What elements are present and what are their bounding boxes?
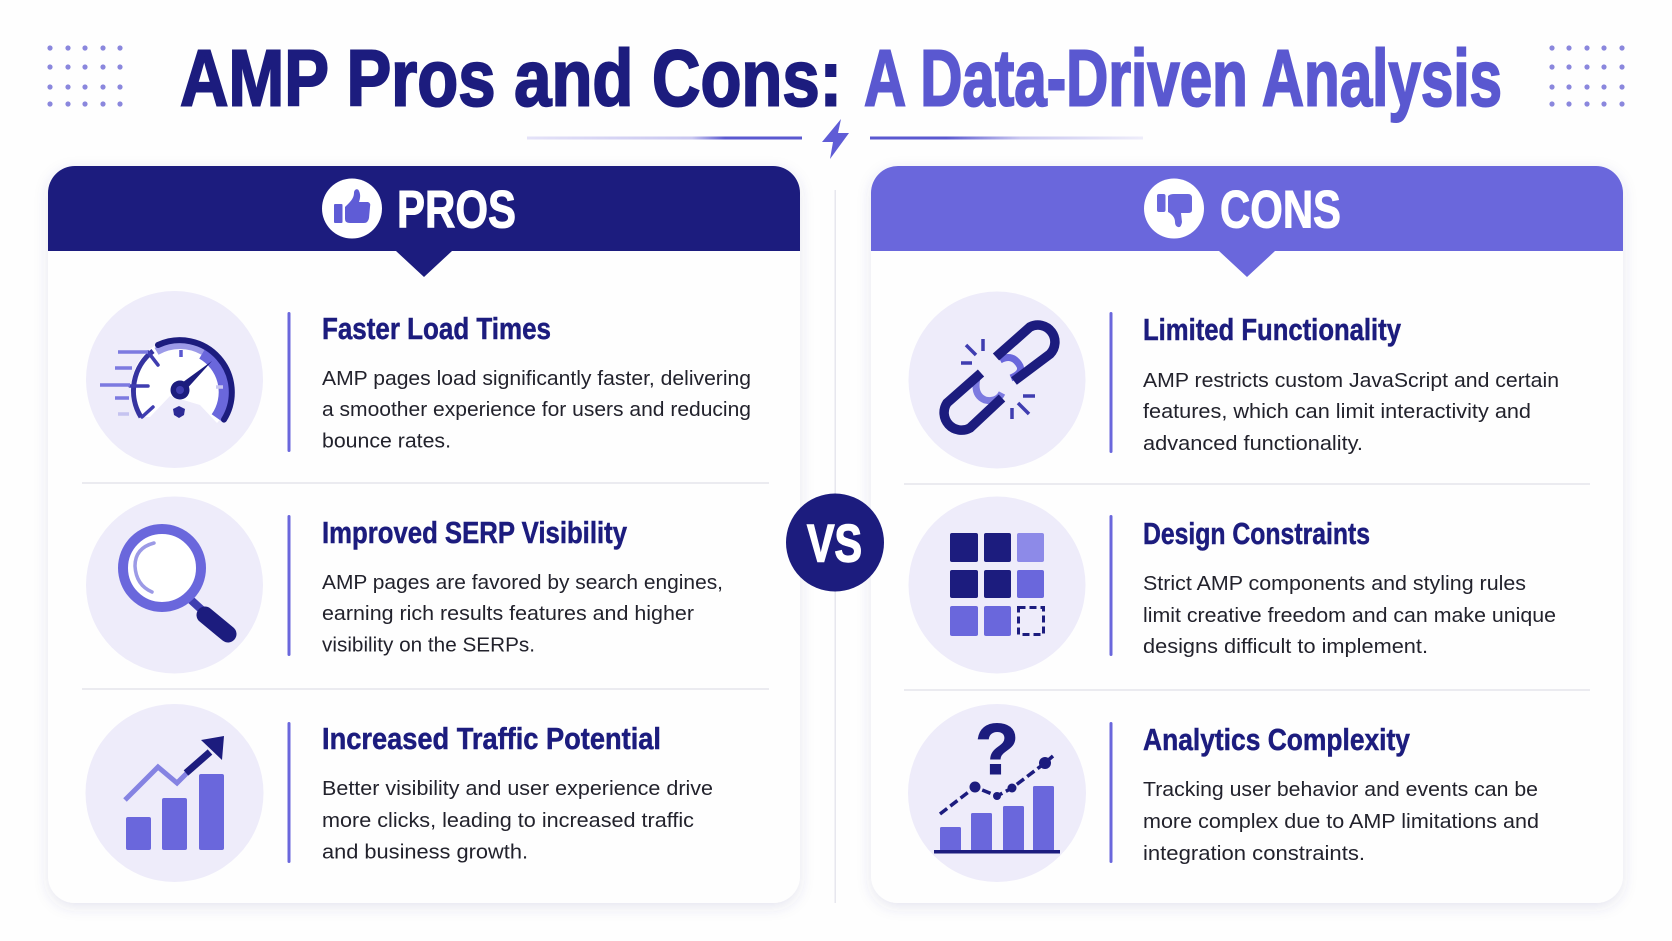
title divider with lightning bolt bbox=[527, 119, 1143, 159]
row: analytics complexity bbox=[908, 704, 1539, 882]
text: design constraints description: limit creative freedom and can make unique bbox=[1143, 604, 1556, 627]
text: design constraints description bbox=[1143, 572, 1556, 658]
text: improved serp visibility description: visibility on the SERPs. bbox=[322, 634, 535, 656]
row: limited functionality bbox=[908, 292, 1559, 468]
icon: speedometer bbox=[86, 291, 263, 468]
text: analytics complexity description bbox=[1143, 778, 1539, 865]
text: faster load times description bbox=[322, 367, 751, 452]
text: analytics complexity description: Tracking user behavior and events can be bbox=[1143, 778, 1538, 801]
icon: broken chain link bbox=[908, 292, 1086, 468]
decorative dots: left bbox=[47, 45, 123, 107]
text: analytics complexity description: integration constraints. bbox=[1143, 842, 1365, 865]
cons heading: CONS bbox=[1220, 180, 1341, 240]
text: design constraints description: Strict AMP components and styling rules bbox=[1143, 572, 1526, 595]
text: increased traffic potential description: more clicks, leading to increased traffic bbox=[322, 809, 694, 832]
pros header banner bbox=[48, 166, 800, 277]
text: faster load times description: a smoother experience for users and reducing bbox=[322, 398, 751, 421]
icon: question mark over chart: ? bbox=[975, 710, 1019, 790]
vs badge bbox=[786, 494, 884, 592]
row: improved serp visibility bbox=[86, 496, 723, 674]
icon: lightning bolt bbox=[822, 119, 849, 159]
text: increased traffic potential description bbox=[322, 777, 713, 864]
icon: growth chart bbox=[86, 704, 264, 882]
row: increased traffic potential bbox=[86, 704, 713, 882]
heading: analytics complexity: Analytics Complexity bbox=[1143, 723, 1410, 757]
icon: question mark over chart bbox=[908, 704, 1086, 882]
heading: improved serp visibility: Improved SERP Visibility bbox=[322, 516, 627, 550]
vs badge: VS bbox=[807, 514, 862, 574]
title bbox=[180, 34, 1502, 122]
row: design constraints bbox=[908, 496, 1556, 674]
text: increased traffic potential description: Better visibility and user experience drive bbox=[322, 777, 713, 800]
panel: pros bbox=[48, 166, 800, 903]
heading: faster load times: Faster Load Times bbox=[322, 312, 551, 346]
icon: thumbs down bbox=[1144, 178, 1204, 238]
heading: increased traffic potential: Increased Traffic Potential bbox=[322, 722, 661, 756]
text: analytics complexity description: more complex due to AMP limitations and bbox=[1143, 810, 1539, 833]
cons header banner bbox=[871, 166, 1623, 277]
center divider line bbox=[834, 190, 836, 903]
icon: layout grid bbox=[908, 496, 1086, 674]
title: AMP Pros and Cons: bbox=[180, 34, 842, 122]
text: limited functionality description bbox=[1143, 369, 1559, 455]
text: limited functionality description: features, which can limit interactivity and bbox=[1143, 400, 1531, 423]
row: faster load times bbox=[86, 291, 751, 468]
decorative dots: right bbox=[1549, 45, 1625, 107]
text: faster load times description: bounce rates. bbox=[322, 430, 451, 452]
text: improved serp visibility description: AMP pages are favored by search engines, bbox=[322, 571, 723, 594]
text: improved serp visibility description: earning rich results features and higher bbox=[322, 602, 694, 625]
panel: cons bbox=[871, 166, 1623, 903]
text: improved serp visibility description bbox=[322, 571, 723, 656]
heading: limited functionality: Limited Functionality bbox=[1143, 313, 1401, 347]
icon: thumbs up bbox=[322, 178, 382, 238]
text: design constraints description: designs difficult to implement. bbox=[1143, 635, 1428, 658]
icon: magnifying glass bbox=[86, 496, 263, 674]
text: limited functionality description: AMP restricts custom JavaScript and certain bbox=[1143, 369, 1559, 392]
text: increased traffic potential description: and business growth. bbox=[322, 840, 528, 864]
text: limited functionality description: advanced functionality. bbox=[1143, 432, 1363, 455]
heading: design constraints: Design Constraints bbox=[1143, 517, 1370, 551]
pros heading: PROS bbox=[397, 180, 516, 240]
text: faster load times description: AMP pages load significantly faster, delivering bbox=[322, 367, 751, 390]
